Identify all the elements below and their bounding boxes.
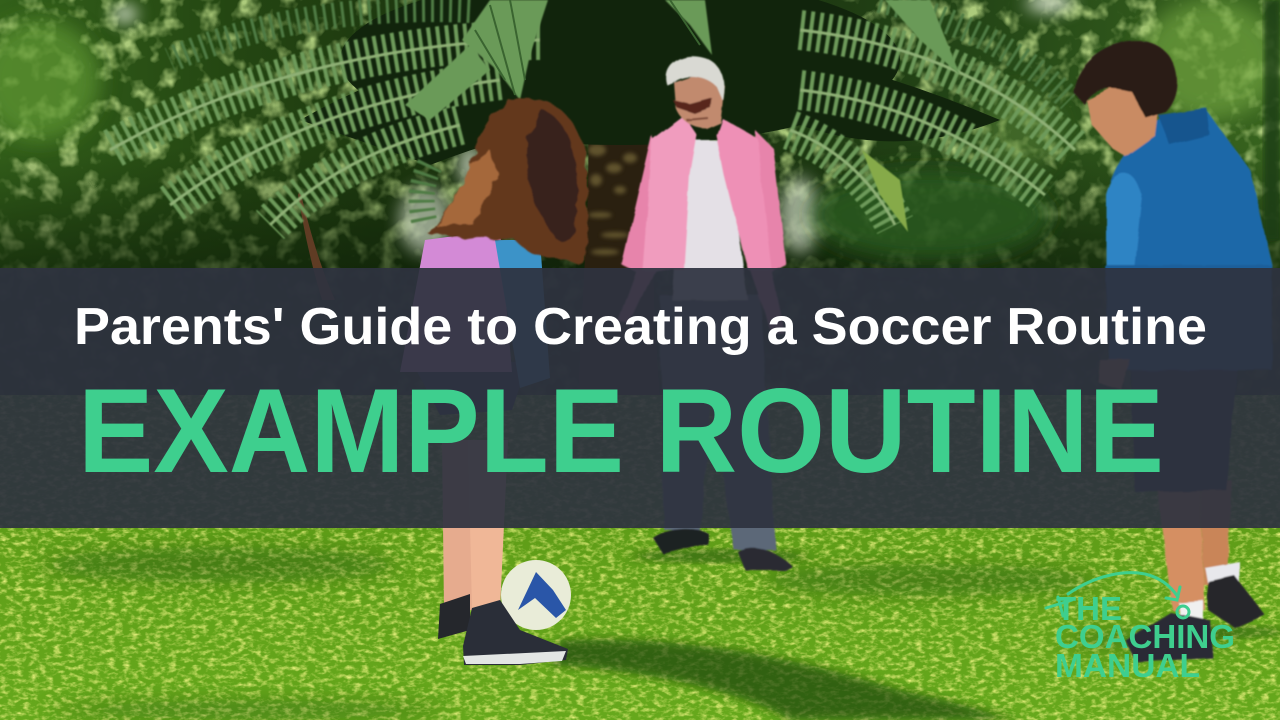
photo background: foliage and sky — [0, 0, 1280, 420]
logo arc arrow — [1046, 573, 1189, 618]
trousers and shoes — [653, 295, 792, 570]
hair — [428, 98, 588, 266]
photo: grandfather in pink shirt — [618, 56, 792, 570]
logo: The Coaching Manual — [1046, 573, 1244, 684]
dark overlay band — [0, 268, 1280, 528]
shorts — [1130, 360, 1238, 492]
grass field — [0, 395, 1280, 720]
shoes — [438, 594, 470, 639]
jacket — [1106, 108, 1272, 265]
palm tree — [110, 0, 1075, 400]
logo wordmark: MANUAL — [1055, 647, 1200, 684]
arms — [618, 135, 668, 324]
photo: boy in blue jacket — [1073, 41, 1272, 662]
soccer ball — [501, 560, 571, 630]
legs and shoes — [1158, 490, 1205, 610]
white t-shirt — [672, 140, 748, 300]
head — [1086, 78, 1160, 156]
arm — [1098, 360, 1130, 388]
logo wordmark: THE — [1056, 590, 1122, 627]
logo wordmark: COACHING — [1055, 618, 1235, 655]
shorts — [412, 362, 528, 415]
legs — [442, 440, 478, 610]
main heading: EXAMPLE ROUTINE — [78, 364, 1164, 498]
pink shirt — [642, 116, 697, 270]
head — [674, 72, 724, 128]
photo: girl with ball — [400, 98, 588, 665]
subtitle: Parents' Guide to Creating a Soccer Routine — [74, 298, 1207, 356]
body and backpack — [400, 230, 512, 372]
